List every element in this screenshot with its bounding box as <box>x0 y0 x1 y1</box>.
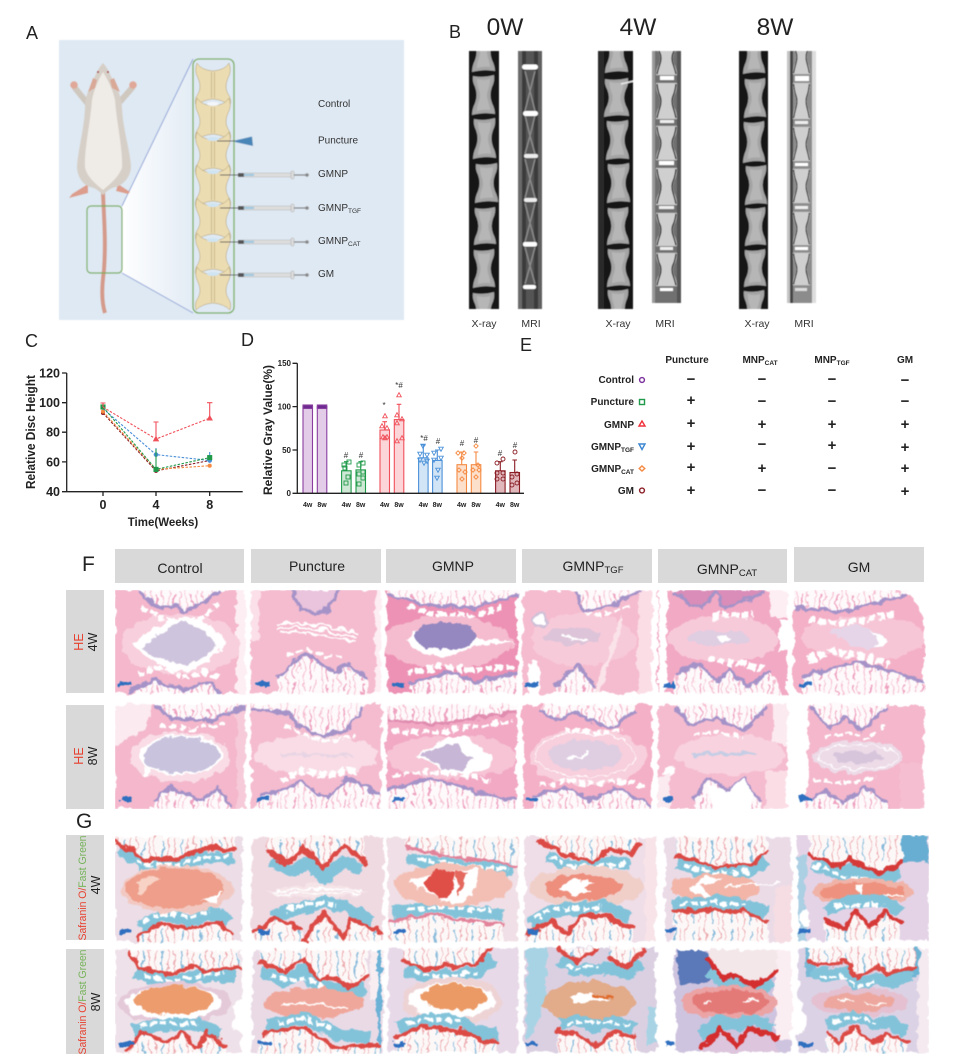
x axis title: Time(Weeks) <box>128 517 198 529</box>
X-ray 0W <box>468 50 500 310</box>
panel D: gray value bar chart <box>263 359 524 509</box>
table row labels: Control <box>598 375 634 386</box>
zoom fan lines <box>122 59 193 313</box>
plus and minus matrix: + <box>687 459 696 476</box>
row label Safranin O/Fast Green 4W: Safranin O/Fast Green <box>77 835 89 940</box>
plus and minus matrix <box>687 371 910 500</box>
legend markers <box>639 378 645 493</box>
y tick labels: 50 <box>282 446 292 455</box>
group labels panel A: GMNP <box>318 203 348 214</box>
y tick labels: 150 <box>278 359 292 368</box>
icon: puncture needle <box>217 136 253 146</box>
axis tick labels: 40 <box>46 485 60 499</box>
plus and minus matrix: − <box>828 371 837 388</box>
HE GM 8W <box>798 702 926 809</box>
significance marks: * <box>382 401 386 410</box>
HE GMNP TGF 4W <box>520 590 655 696</box>
series GMNP TGF <box>103 409 212 462</box>
axis tick labels: 8 <box>206 498 213 512</box>
plus and minus matrix: + <box>687 415 696 432</box>
plus and minus matrix: + <box>901 439 910 456</box>
icon: rat <box>69 63 137 313</box>
y tick labels: 100 <box>278 402 292 412</box>
icon: syringe GMNP <box>220 171 309 179</box>
table column headers: TGF <box>837 360 850 367</box>
panel E: treatment table <box>591 355 913 500</box>
HE Puncture 8W <box>248 702 384 809</box>
time header 8W: 8W <box>757 14 794 41</box>
group labels panel A: GM <box>318 269 334 280</box>
significance marks: # <box>498 449 503 458</box>
axis tick labels: 4 <box>153 498 160 512</box>
HE GMNP CAT 4W <box>655 590 790 696</box>
imaging modality labels: X-ray <box>605 318 631 330</box>
HE GMNP 4W <box>384 590 520 695</box>
table row labels: GMNP <box>591 442 621 453</box>
HE GMNP 8W <box>384 702 519 809</box>
row label HE 8W <box>66 705 104 809</box>
plus and minus matrix: − <box>687 371 696 388</box>
green selection box on tail <box>87 206 122 273</box>
axis tick labels: 0 <box>100 498 107 512</box>
significance marks: # <box>344 451 349 460</box>
imaging modality labels: MRI <box>521 318 541 330</box>
row label Safranin O/Fast Green 8W: 8W <box>89 992 103 1011</box>
panel label A: A <box>26 23 38 43</box>
HE Puncture 4W <box>249 590 382 696</box>
group labels panel A: Puncture <box>318 136 358 146</box>
time header 0W: 0W <box>487 14 524 41</box>
plus and minus matrix: − <box>901 372 910 389</box>
x tick labels: 8w <box>510 502 520 509</box>
group labels panel A: GMNP <box>318 169 348 180</box>
plus and minus matrix: + <box>828 416 837 433</box>
table row labels: GM <box>618 486 634 497</box>
x tick labels <box>303 502 520 509</box>
table row labels <box>591 375 634 497</box>
x tick labels: 4w <box>496 502 506 509</box>
X-ray 8W <box>738 50 769 310</box>
series Puncture <box>101 405 212 471</box>
panel label F: F <box>82 553 95 576</box>
plus and minus matrix: + <box>687 392 696 409</box>
group labels panel A: GMNP <box>318 236 348 247</box>
plus and minus matrix: − <box>758 436 767 453</box>
axis tick labels: 120 <box>39 366 60 380</box>
axis tick labels <box>39 366 213 512</box>
group header bar: TGF <box>604 565 624 576</box>
HE GMNP CAT 8W <box>656 702 790 809</box>
significance marks <box>344 381 518 460</box>
significance marks: *# <box>420 434 428 443</box>
bars control <box>303 405 327 493</box>
group header bar: GMNP <box>562 558 604 574</box>
MRI 8W <box>786 50 816 304</box>
data points <box>342 393 519 487</box>
bars <box>303 404 520 493</box>
y axis title: Relative Gray Value(%) <box>263 365 275 495</box>
table row labels: GMNP <box>604 420 634 431</box>
table row labels: GMNP <box>591 464 621 475</box>
HE Control 8W <box>115 702 248 809</box>
background panel A <box>59 40 404 320</box>
table column headers: Puncture <box>665 355 709 366</box>
Safranin Puncture 8W <box>250 948 386 1054</box>
group labels panel A: TGF <box>348 208 361 215</box>
panel F: HE histology grid <box>115 590 926 809</box>
Safranin Puncture 4W <box>250 835 386 944</box>
group header bar: GMNP <box>697 561 739 577</box>
Safranin Control 8W <box>115 948 244 1054</box>
icon: syringe GMNP CAT <box>220 238 309 246</box>
plus and minus matrix: − <box>901 393 910 410</box>
x tick labels: 8w <box>394 502 404 509</box>
panel label D: D <box>241 330 254 350</box>
Safranin GM 4W <box>795 835 929 943</box>
imaging modality labels: X-ray <box>744 318 770 330</box>
spine column <box>195 63 231 310</box>
Safranin GMNP TGF 8W <box>522 944 660 1054</box>
row label Safranin O/Fast Green 8W: Safranin O/Fast Green <box>77 949 89 1054</box>
panel label E: E <box>520 335 532 355</box>
row label HE 4W: HE <box>72 633 86 651</box>
significance marks: # <box>436 437 441 446</box>
group labels panel A: CAT <box>348 241 361 248</box>
axes <box>62 373 243 496</box>
Safranin GMNP CAT 4W <box>662 835 794 944</box>
imaging modality labels: X-ray <box>471 318 497 330</box>
group labels panel A <box>318 99 361 280</box>
green selection box on spine <box>193 59 234 313</box>
group header bar: CAT <box>739 568 757 579</box>
group header bar: Control <box>157 560 203 576</box>
Safranin GMNP CAT 8W <box>664 948 794 1054</box>
panel A: experimental design illustration <box>59 40 404 320</box>
bars puncture <box>342 462 366 493</box>
imaging modality labels <box>471 318 814 330</box>
panel label G: G <box>76 810 92 833</box>
y tick labels <box>278 359 292 498</box>
series GMNP <box>100 403 212 441</box>
panel label B: B <box>449 22 461 42</box>
bars GMNP <box>380 404 404 493</box>
x tick labels: 4w <box>303 502 313 509</box>
x tick labels: 8w <box>433 502 443 509</box>
plus and minus matrix: − <box>828 482 837 499</box>
Safranin GMNP 8W <box>386 946 520 1054</box>
axis tick labels: 80 <box>46 426 60 440</box>
significance marks: *# <box>395 381 403 390</box>
panel B: X-ray and MRI images <box>469 32 816 332</box>
axes <box>292 363 524 493</box>
x tick labels: 8w <box>356 502 366 509</box>
panel label C: C <box>25 331 38 351</box>
bars GMNP CAT <box>457 452 481 493</box>
group header bar: Puncture <box>289 558 345 574</box>
significance marks: # <box>513 441 518 450</box>
row label HE 4W <box>66 590 104 693</box>
imaging modality labels: MRI <box>794 318 814 330</box>
table column headers <box>665 355 913 367</box>
x tick labels: 4w <box>419 502 429 509</box>
row label Safranin O/Fast Green 4W: 4W <box>89 875 103 894</box>
Safranin GMNP 4W <box>386 835 520 944</box>
plus and minus matrix: − <box>758 393 767 410</box>
row label Safranin O/Fast Green 8W <box>66 949 104 1054</box>
plus and minus matrix: + <box>901 416 910 433</box>
panel G: Safranin O histology grid <box>115 835 929 1054</box>
table column headers: MNP <box>814 355 837 366</box>
HE GMNP TGF 8W <box>520 702 654 809</box>
row label HE 8W: 8W <box>86 746 100 765</box>
table row labels: Puncture <box>591 397 634 408</box>
plus and minus matrix: + <box>758 416 767 433</box>
HE Control 4W <box>115 590 248 696</box>
x tick labels: 4w <box>457 502 467 509</box>
significance marks: # <box>474 436 479 445</box>
y tick labels: 0 <box>287 489 292 498</box>
axis tick labels: 100 <box>39 396 60 410</box>
table row labels: TGF <box>621 447 634 454</box>
x tick labels: 8w <box>471 502 481 509</box>
table column headers: CAT <box>765 360 778 367</box>
imaging modality labels: MRI <box>655 318 675 330</box>
icon: syringe GM <box>220 271 309 279</box>
series GMNP CAT <box>102 410 211 469</box>
plus and minus matrix: + <box>687 438 696 455</box>
table row labels: CAT <box>621 469 634 476</box>
Safranin GMNP TGF 4W <box>522 835 658 944</box>
plus and minus matrix: − <box>828 460 837 477</box>
plus and minus matrix: + <box>828 437 837 454</box>
significance marks: # <box>359 451 364 460</box>
bars GMNP TGF <box>419 445 442 493</box>
MRI 0W <box>517 50 543 310</box>
y axis title: Relative Disc Height <box>24 374 38 489</box>
panel C: disc height line chart <box>24 366 243 529</box>
group header bar: GM <box>848 559 870 575</box>
time header 4W: 4W <box>620 14 657 41</box>
table column headers: GM <box>897 355 913 366</box>
axis tick labels: 60 <box>46 455 60 469</box>
x tick labels: 8w <box>317 502 327 509</box>
plus and minus matrix: + <box>901 460 910 477</box>
plus and minus matrix: + <box>687 482 696 499</box>
X-ray 4W <box>597 50 634 310</box>
MRI 4W <box>652 50 682 304</box>
plus and minus matrix: − <box>758 482 767 499</box>
bars GM <box>496 460 520 493</box>
x tick labels: 4w <box>342 502 352 509</box>
group header bar: GMNP <box>432 558 474 574</box>
HE GM 4W <box>791 590 926 696</box>
Safranin Control 4W <box>115 835 244 944</box>
Safranin GM 8W <box>794 946 929 1054</box>
row label Safranin O/Fast Green 4W <box>66 835 104 940</box>
row label HE 8W: HE <box>72 747 86 765</box>
icon: syringe GMNP TGF <box>220 204 309 212</box>
x tick labels: 4w <box>380 502 390 509</box>
plus and minus matrix: + <box>901 483 910 500</box>
row label HE 4W: 4W <box>86 632 100 651</box>
significance marks: # <box>460 439 465 448</box>
plus and minus matrix: − <box>828 393 837 410</box>
group labels panel A: Control <box>318 99 350 110</box>
group header bar <box>115 547 924 583</box>
plus and minus matrix: + <box>758 460 767 477</box>
series GM <box>102 412 211 472</box>
table column headers: MNP <box>742 355 765 366</box>
plus and minus matrix: − <box>758 371 767 388</box>
